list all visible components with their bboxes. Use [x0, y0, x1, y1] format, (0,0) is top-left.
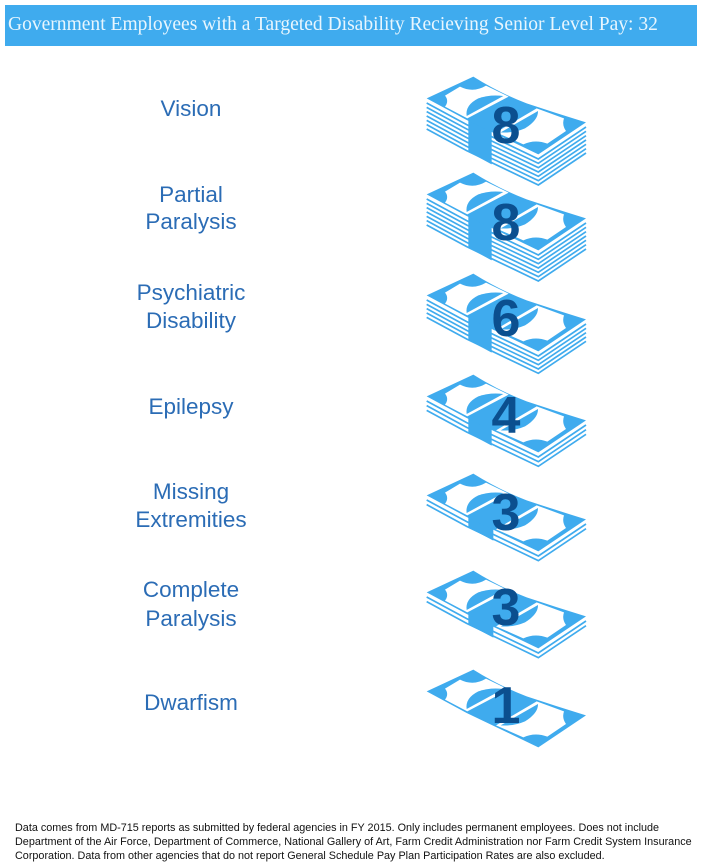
label: Missing Extremities: Missing	[153, 479, 229, 504]
icon: single bill	[427, 670, 586, 747]
value: 6: 6	[492, 290, 520, 348]
label: Complete Paralysis: Complete	[143, 577, 239, 602]
footnote: Department of the Air Force, Department of Commerce, National Gallery of Art, Farm Credit Administration nor Farm Credit System Insurance	[15, 836, 692, 848]
label: Complete Paralysis: Paralysis	[145, 606, 237, 631]
icon: money stack of 3	[427, 474, 586, 561]
label: Psychiatric Disability: Disability	[146, 308, 237, 333]
label: Dwarfism: Dwarfism	[144, 690, 238, 715]
value: 4: 4	[492, 387, 521, 445]
row: Complete Paralysis	[143, 571, 586, 658]
label: Partial Paralysis: Paralysis	[145, 209, 237, 234]
icon: money stack of 3	[427, 571, 586, 658]
row: Dwarfism	[144, 670, 586, 747]
label: Psychiatric Disability: Psychiatric	[137, 280, 245, 305]
value: 3: 3	[492, 484, 520, 542]
value: 1: 1	[492, 677, 520, 735]
label: Missing Extremities: Extremities	[135, 507, 247, 532]
footnote: Corporation. Data from other agencies that do not report General Schedule Pay Plan Participation Rates are also excluded.	[15, 850, 605, 862]
value: 3: 3	[492, 579, 520, 637]
label: Vision: Vision	[161, 96, 221, 121]
icon: money stack of 8	[427, 77, 586, 185]
row: Epilepsy	[148, 375, 586, 466]
title: Government Employees with a Targeted Disability Recieving Senior Level Pay: 32	[8, 14, 658, 35]
row: Partial Paralysis	[145, 173, 586, 281]
icon: money stack of 6	[427, 274, 586, 373]
label: Epilepsy: Epilepsy	[148, 394, 234, 419]
value: 8: 8	[492, 194, 520, 252]
label: Partial Paralysis: Partial	[159, 182, 223, 207]
row: Psychiatric Disability	[137, 274, 586, 373]
icon: money stack of 4	[427, 375, 586, 466]
icon: money stack of 8	[427, 173, 586, 281]
footnote: Data comes from MD-715 reports as submitted by federal agencies in FY 2015. Only includes permanent employees. Does not include	[15, 822, 659, 834]
row: Missing Extremities	[135, 474, 586, 561]
footnote	[15, 822, 692, 862]
row: Vision	[161, 77, 586, 185]
title	[5, 5, 697, 46]
value: 8: 8	[492, 97, 520, 155]
